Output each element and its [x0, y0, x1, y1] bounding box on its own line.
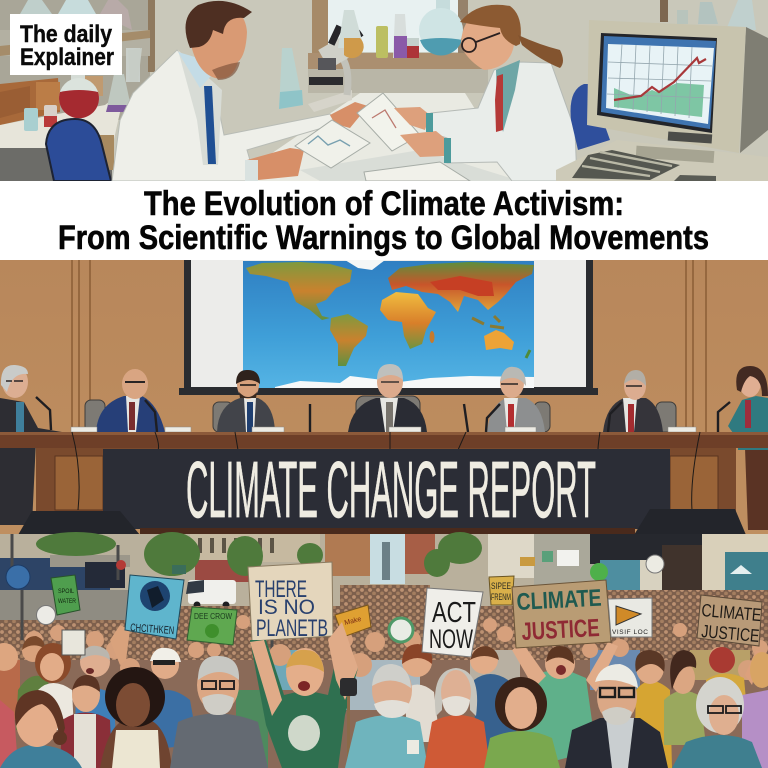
street lamp and posts — [12, 534, 272, 660]
older man in blue polo — [345, 664, 428, 768]
shouting boy in green shirt — [250, 622, 358, 768]
green balloon — [590, 563, 608, 581]
panelist 6 — [603, 370, 663, 432]
placard: There is no Planet B — [248, 562, 333, 642]
panel: global protest march — [0, 532, 768, 768]
Antarctica ice — [275, 376, 534, 388]
middle crowd — [0, 615, 768, 768]
line chart on screen — [607, 44, 712, 118]
small white sign — [62, 630, 85, 655]
microscope — [308, 25, 363, 112]
woman with afro — [100, 667, 172, 768]
mid person yellow shirt — [634, 650, 672, 768]
white van — [186, 580, 236, 608]
storage boxes — [0, 76, 103, 125]
grey-bearded man — [170, 656, 268, 768]
round white sign — [36, 606, 56, 624]
placard: Climate Justice cardboard — [697, 595, 762, 646]
Africa — [380, 292, 436, 349]
round recycling sign — [389, 618, 413, 642]
placard: Climate Justice large: JUSTICE — [521, 614, 600, 646]
placard: orange sign — [335, 605, 371, 637]
face — [461, 14, 514, 70]
woman in green top — [484, 677, 560, 768]
mid person maroon jacket — [60, 675, 112, 768]
rear heads row — [25, 615, 768, 680]
mid person white shirt woman — [402, 644, 440, 742]
mid person grey hair shouting — [74, 646, 116, 745]
wall pilasters — [72, 260, 706, 432]
head — [190, 2, 247, 79]
logo: The daily Explainer — [10, 14, 122, 75]
placard: Act Now: ACT — [432, 597, 476, 629]
placard: small green list: SPOIL — [58, 589, 75, 595]
street signs — [6, 550, 664, 589]
mid person blue shirt — [470, 646, 520, 768]
placard: There is no Planet B: THERE — [255, 576, 307, 603]
city background — [0, 534, 768, 634]
mid person olive shirt — [664, 650, 706, 745]
older woman in teal — [672, 677, 762, 768]
placard: Climate Justice large — [512, 580, 611, 648]
placard: green sun sign: DEE CROW — [194, 612, 232, 621]
long-haired man in orange — [424, 668, 490, 768]
conference table — [0, 432, 768, 513]
placard: Climate Justice large: CLIMATE — [516, 585, 602, 616]
megaphone — [340, 678, 357, 696]
placard: small green list — [51, 575, 80, 615]
South America — [330, 314, 368, 366]
computer keyboard — [556, 140, 768, 181]
Australia — [484, 330, 514, 350]
panelist 1 — [0, 365, 62, 525]
mid person red hair — [706, 647, 762, 700]
red flask — [59, 70, 99, 118]
male scientist — [112, 1, 368, 181]
lab coat — [431, 62, 577, 181]
placard: Act Now — [422, 588, 483, 657]
shirt and tie — [178, 52, 220, 88]
title band — [0, 181, 768, 260]
hands — [247, 148, 304, 180]
mid person left — [16, 636, 52, 730]
placard: small green list: WATER — [58, 599, 77, 605]
glasses — [462, 33, 500, 52]
placard: arrow sign — [608, 598, 652, 637]
sidewalk — [0, 590, 150, 620]
ponytail — [518, 35, 563, 68]
Asia hot spot — [430, 276, 494, 296]
mid person far left pink — [0, 643, 18, 768]
placard: blue earth sign: CHCITHKEN — [130, 622, 175, 637]
female scientist — [394, 5, 610, 181]
lab counter — [0, 90, 125, 181]
panelist 4 — [348, 364, 427, 432]
world climate map — [243, 260, 534, 388]
microphones — [36, 397, 730, 432]
mid person woman brown hair — [35, 643, 74, 730]
blue chair — [46, 119, 111, 181]
window and sill — [308, 0, 488, 93]
small bottles — [24, 48, 142, 131]
lab table — [225, 93, 520, 181]
logo: The daily Explainer: Explainer — [20, 44, 114, 71]
CRT monitor — [587, 20, 768, 153]
panelist 7 — [728, 366, 768, 530]
placard: orange sign: Make — [344, 616, 362, 627]
hands — [394, 107, 430, 130]
girl with ponytail — [0, 690, 82, 768]
Madagascar — [430, 331, 434, 343]
placard: green sun sign — [187, 607, 237, 645]
panel: scientists in the laboratory — [0, 0, 768, 181]
mid person teal shirt arms raised — [512, 642, 618, 768]
placard: There is no Planet B: IS NO — [258, 596, 315, 619]
Indonesia islands — [472, 316, 504, 328]
panelist 3 — [217, 370, 275, 432]
placard: small yellow: SIPEE — [491, 581, 511, 591]
title line 1: The Evolution of Climate Activism: — [144, 185, 624, 223]
name placards — [71, 427, 696, 432]
stage speakers — [18, 509, 746, 535]
North America — [246, 262, 352, 320]
street trees — [36, 532, 482, 577]
placard: small yellow: FRENM — [491, 592, 511, 602]
Eurasia — [388, 262, 534, 312]
placard: blue earth sign — [125, 575, 184, 639]
panel: climate change report hearing — [0, 260, 768, 535]
clothing blocks — [0, 650, 750, 768]
placard: small yellow — [489, 576, 514, 605]
placard: arrow sign: VISIF LOC — [612, 629, 648, 636]
lab shelf glassware — [20, 0, 140, 82]
Greenland and arctic ice — [345, 260, 385, 270]
placard: There is no Planet B: PLANETB — [256, 615, 328, 642]
research papers — [295, 93, 470, 181]
panelist 2 — [96, 369, 165, 432]
chairs — [85, 396, 676, 432]
man in dark suit and cap — [565, 664, 668, 768]
distant crowd — [150, 606, 768, 768]
blue chair behind — [571, 84, 610, 150]
projection screen — [179, 260, 598, 395]
glass cylinder — [279, 48, 303, 109]
lab coat — [112, 50, 336, 181]
windowsill flasks — [338, 0, 463, 58]
background shelf flasks right — [660, 0, 756, 30]
mid person sun hat — [110, 625, 198, 750]
front row protesters — [0, 622, 762, 768]
panelist 5 — [487, 367, 545, 432]
mid person lilac shirt — [742, 652, 768, 768]
logo: The daily Explainer: The daily — [20, 21, 113, 48]
placard: Act Now: NOW — [429, 624, 473, 654]
